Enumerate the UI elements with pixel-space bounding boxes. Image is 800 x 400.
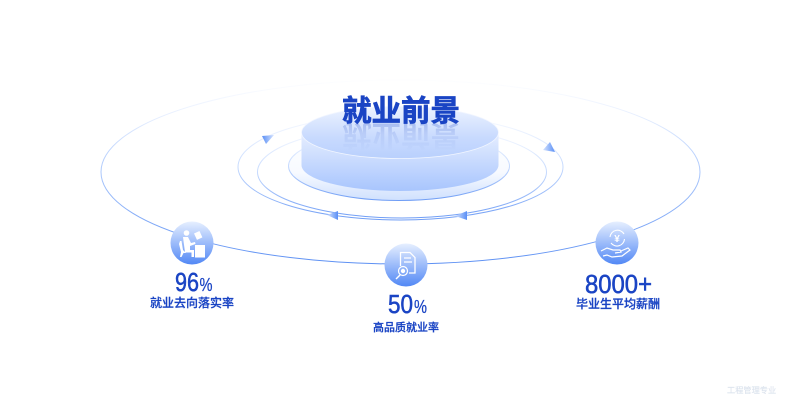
metric: placement rate: % — [200, 275, 212, 295]
icon: person at desk — [170, 222, 214, 264]
value: 50 — [388, 289, 413, 319]
label: 就业去向落实率 — [150, 295, 234, 310]
icon: hand holding yuan coin: ¥ — [614, 234, 620, 245]
orbit ring 2 — [258, 126, 546, 218]
orbit ring 1 — [238, 114, 563, 220]
disc side — [302, 133, 498, 191]
base plate — [288, 132, 510, 200]
arrow: upper right — [543, 142, 555, 152]
disc top — [302, 106, 498, 158]
metric: high quality employment: % — [414, 297, 427, 317]
value: 8000+ — [585, 269, 652, 299]
central disc — [302, 106, 498, 191]
metric: high quality employment — [373, 244, 439, 334]
icon: document and magnifier — [384, 244, 428, 286]
arrow: bottom left — [327, 211, 338, 220]
value: 96 — [175, 267, 199, 297]
title reflection: 就业前景 — [342, 118, 460, 151]
arrow: upper left — [262, 135, 274, 144]
arrow: bottom right — [455, 211, 467, 220]
outer orbit ellipse — [101, 80, 700, 264]
title: 就业前景 — [342, 95, 460, 128]
label: 毕业生平均薪酬 — [576, 296, 660, 311]
metric: average salary — [576, 222, 660, 311]
footer watermark: 工程管理专业 — [727, 385, 776, 395]
label: 高品质就业率 — [373, 320, 439, 334]
metric: placement rate — [150, 222, 234, 310]
